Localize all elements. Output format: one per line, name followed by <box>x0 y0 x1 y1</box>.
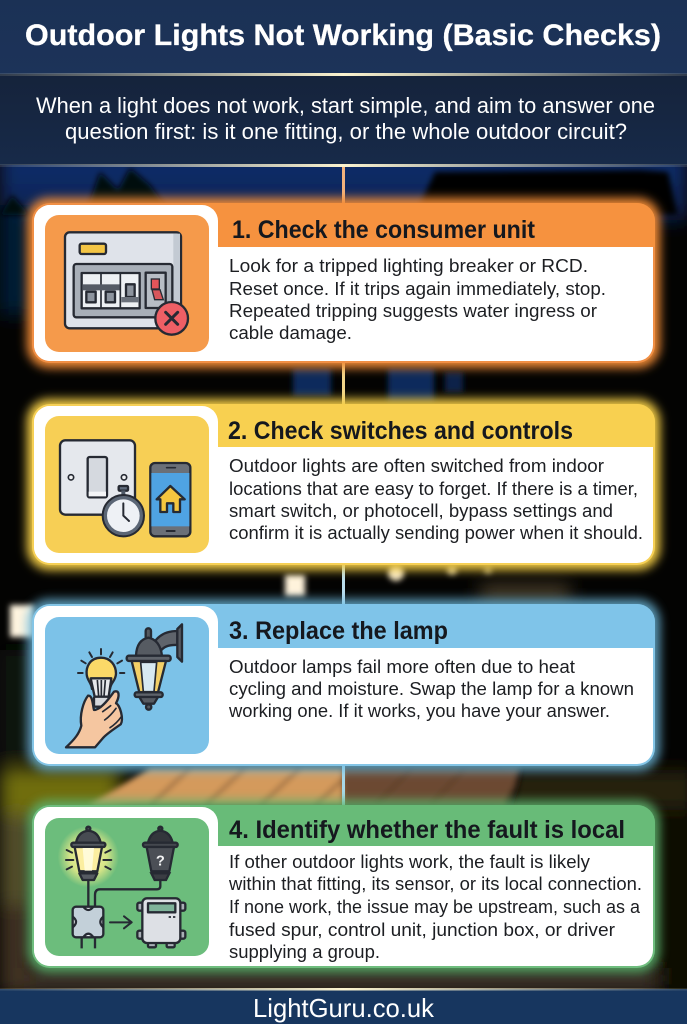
panel: step 3 replace the lamp <box>27 599 660 771</box>
body text: fused spur, control unit, junction box, or driver <box>229 919 615 940</box>
connector line <box>342 166 345 807</box>
icon: bulb, hand and wall lantern <box>66 624 182 747</box>
heading: 3. Replace the lamp <box>229 617 448 645</box>
body text: supplying a group. <box>229 941 380 962</box>
body text: confirm it is actually sending power when it should. <box>229 522 643 543</box>
title: Outdoor Lights Not Working (Basic Checks) <box>25 19 661 52</box>
intro text: question first: is it one fitting, or the whole outdoor circuit? <box>65 119 627 144</box>
body text: smart switch, or photocell, bypass settings and <box>229 500 613 521</box>
panel: step 2 switches and controls <box>27 399 660 570</box>
panel: step 4 identify local fault <box>27 800 660 973</box>
icon: switch, timer and phone <box>60 440 190 536</box>
body text: If none work, the issue may be upstream, such as a <box>229 896 641 917</box>
intro band <box>0 73 687 167</box>
heading: 1. Check the consumer unit <box>232 216 536 244</box>
body text: Outdoor lamps fail more often due to heat <box>229 656 575 677</box>
body text: cable damage. <box>229 322 352 343</box>
body text: within that fitting, its sensor, or its local connection. <box>228 873 642 894</box>
body text: If other outdoor lights work, the fault is likely <box>229 851 591 872</box>
intro text: When a light does not work, start simple, and aim to answer one <box>36 93 655 118</box>
body text: working one. If it works, you have your answer. <box>228 700 610 721</box>
header band <box>0 0 687 74</box>
heading: 2. Check switches and controls <box>228 417 573 445</box>
icon: lit and unlit lanterns with junction box and control unit <box>58 826 185 948</box>
body text: Look for a tripped lighting breaker or RCD. <box>229 255 588 276</box>
body text: Repeated tripping suggests water ingress or <box>229 300 597 321</box>
footer band <box>0 988 687 1024</box>
body text: cycling and moisture. Swap the lamp for a known <box>229 678 634 699</box>
body text: locations that are easy to forget. If there is a timer, <box>229 478 638 499</box>
icon: lit and unlit lanterns with junction box and control unit: ? <box>156 853 165 869</box>
body text: Outdoor lights are often switched from indoor <box>229 455 604 476</box>
footer website: LightGuru.co.uk <box>253 993 435 1023</box>
body text: Reset once. If it trips again immediately, stop. <box>229 278 606 299</box>
panel: step 1 consumer unit <box>27 198 660 368</box>
icon: consumer unit <box>65 232 188 335</box>
heading: 4. Identify whether the fault is local <box>229 816 625 844</box>
